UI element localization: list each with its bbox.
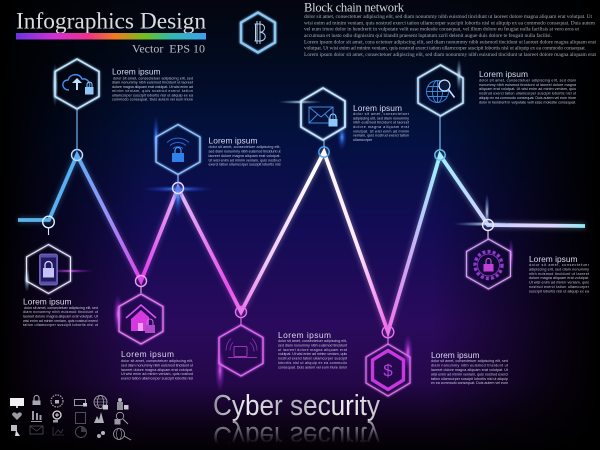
text block: dollar: diam nonummy nibh euismod tincidunt ut	[431, 363, 508, 367]
text block: mail: veniam, quis nostrud exerci tation	[353, 134, 409, 138]
heading and paragraph: block chain network: Lorem ipsum dolor sit amet, cons ectetuer adipiscing elit, sed diam nonummy nibh euismod tincidunt ut laoreet dolore magna aliquam erat	[304, 39, 596, 45]
text block: mail: ullamcorper	[353, 138, 373, 142]
text block: wifi	[208, 136, 281, 167]
text block: mail: nibh euismod tincidunt ut laoreet	[353, 121, 409, 125]
text block: cloud: dolore magna aliquam erat volutpat. Ut wisi enim ad	[112, 85, 193, 89]
heading and paragraph: block chain network: Lorem ipsum dolor sit amet, consectetuer adipiscing elit, sed diam nonummy nibh euismod tincidunt ut laoreet dolore magna aliquam erat	[304, 52, 596, 58]
text block: cloud: dolor sit amet, consectetuer adipiscing elit, sed	[113, 76, 193, 80]
text block: mobile: diam nonummy nibh euismod tincidunt ut	[23, 310, 98, 314]
text block: wifi: exerci tation ullamcorper suscipit lobortis nisl	[208, 163, 281, 167]
text block: globe: aliquip ex ea commodo consequat. Duis autem vel eum iriure	[479, 96, 576, 100]
text block: monitor: sed diam nonummy nibh euismod tincidunt	[278, 343, 347, 347]
text block: mail: adipiscing elit, sed diam nonummy	[353, 116, 409, 120]
heading and paragraph: block chain network: wisi enim ad minim veniam, quis nostrud exerci tation ullamcorper suscipit lobortis nisl ut aliquip ex ea commodo consequat. Duis autem	[304, 20, 596, 26]
heading and paragraph: block chain network: dolor sit amet, consectetuer adipiscing elit, sed diam nonummy nibh euismod tincidunt ut laoreet dolore magna aliquam erat volutpat. Ut	[304, 14, 592, 20]
text block: wifi: sed diam nonummy nibh euismod tincidunt ut	[208, 150, 280, 154]
text block: dollar	[431, 350, 508, 385]
icon: gear lock hexagon	[466, 239, 510, 289]
text block: gear: dolore magna aliquam erat volutpat.	[529, 276, 589, 280]
text block: wifi: Lorem ipsum	[208, 136, 258, 146]
text block: mobile: laoreet dolore magna aliquam erat volutpat. Ut	[23, 314, 98, 318]
heading and paragraph: block chain network: accumsan et iusto odio dignissim qui blandit praesent luptatum zzril delenit augue duis dolore te feugait nulla facilisi.	[304, 32, 553, 39]
text block: mail: volutpat. Ut wisi enim ad minim	[353, 129, 409, 133]
text block: house: dolor sit amet, consectetuer adipiscing elit,	[121, 359, 193, 363]
text block: gear: Lorem ipsum	[529, 254, 578, 264]
text block: dollar: laoreet dolore magna aliquam erat volutpat. Ut	[431, 368, 508, 372]
icon: monitor signal hexagon	[219, 325, 263, 376]
text block: house: Ut wisi enim ad minim veniam, quis nostrud	[121, 372, 193, 376]
text block: wifi: laoreet dolore magna aliquam erat volutpat.	[208, 154, 280, 158]
text block: dollar: Lorem ipsum	[431, 350, 480, 360]
connecting wave line	[18, 152, 585, 332]
text block: mail: dolor sit amet, consectetuer	[353, 112, 410, 116]
text block: monitor: volutpat. Ut wisi enim ad minim veniam, quis	[278, 352, 347, 356]
text block: globe: Lorem ipsum	[479, 69, 528, 79]
text block: dollar: ex ea commodo consequat. Duis autem vel eum	[431, 381, 508, 385]
text block: gear: adipiscing elit, sed diam nonummy	[529, 267, 589, 271]
heading and paragraph: block chain network: Block chain network	[304, 0, 405, 14]
text block: cloud	[112, 66, 194, 102]
main title: cyber security: Cyber security	[213, 390, 380, 422]
text block: wifi: dolor sit amet, consectetuer adipiscing elit,	[208, 145, 280, 149]
node connectors	[48, 109, 488, 344]
text block: dollar: tation ullamcorper suscipit lobortis nisl ut aliquip	[431, 377, 508, 381]
light flares	[24, 59, 517, 392]
text block: gear: nostrud exerci tation ullamcorper	[529, 285, 590, 289]
text block: monitor: dolor sit amet, consectetuer adipiscing elit,	[278, 339, 347, 343]
text block: gear	[529, 254, 590, 293]
text block: gear: Ut wisi enim ad minim veniam, quis	[529, 281, 589, 285]
text block: mobile: dolor sit amet, consectetuer adipiscing elit, sed	[24, 306, 98, 310]
text block: mail	[353, 103, 410, 142]
text block: globe: dolor in hendrerit in vulputate velit esse molestie consequat.	[479, 100, 576, 104]
text block: globe: nostrud exerci tation ullamcorper suscipit lobortis nisl ut	[479, 92, 576, 96]
text block: gear: dolor sit amet, consectetuer	[529, 263, 590, 267]
text block: monitor: Lorem ipsum	[278, 330, 331, 340]
text block: cloud: Lorem ipsum	[112, 66, 161, 76]
text block: monitor	[278, 330, 348, 370]
text block: house: Lorem ipsum	[121, 349, 174, 359]
text block: mobile: Lorem ipsum	[23, 296, 72, 306]
row three icons	[11, 425, 131, 440]
text block: globe: nonummy nibh euismod tincidunt ut laoreet dolore magna	[479, 83, 577, 87]
icon: dollar hexagon	[366, 344, 410, 396]
icon: dollar hexagon: $	[383, 361, 393, 380]
text block: house: exerci tation ullamcorper suscipit lobortis nisl	[121, 377, 193, 381]
heading and paragraph: block chain network	[304, 0, 596, 58]
node rings	[43, 147, 493, 338]
row one icons	[10, 395, 128, 410]
heading and paragraph: block chain network: vel eum iriure dolor in hendrerit in vulputate velit esse molestie consequat, vel illum dolore eu feugiat nulla facilisis at vero eros et	[304, 26, 579, 33]
row two icons	[12, 411, 128, 424]
icon: baht hexagon	[241, 12, 275, 52]
icon set	[10, 395, 131, 440]
icon: cloud upload hexagon	[55, 59, 99, 109]
text block: globe	[479, 69, 577, 104]
icon: wifi lock hexagon	[156, 124, 200, 174]
text block: monitor: consequat. Duis autem vel eum iriure dolor	[278, 366, 348, 370]
text block: wifi: Ut wisi enim ad minim veniam, quis nostrud	[208, 158, 280, 162]
text block: mail: dolore magna aliquam erat	[353, 125, 409, 129]
icon: house lock hexagon	[119, 294, 163, 344]
text block: monitor: lobortis nisl ut aliquip ex ea commodo	[278, 361, 347, 365]
text block: cloud: ullamcorper suscipit lobortis nisl ut aliquip ex ea	[112, 93, 194, 97]
text block: house: laoreet dolore magna aliquam erat volutpat.	[121, 368, 193, 372]
text block: house	[121, 349, 193, 381]
text block: cloud: commodo consequat. Duis autem vel eum iriure	[112, 98, 193, 102]
icon: mail lock hexagon	[301, 88, 345, 140]
text block: mobile: tation ullamcorper suscipit lobortis nisl ut	[23, 323, 98, 327]
text block: gear: suscipit lobortis nisl ut aliquip ex ea	[529, 289, 590, 293]
text block: globe: aliquam erat volutpat. Ut wisi enim ad minim veniam, quis	[479, 87, 576, 91]
text block: monitor: nostrud exerci tation ullamcorper suscipit	[278, 357, 347, 361]
text block: cloud: minim veniam, quis nostrud exerci tation	[112, 89, 193, 93]
title: Infographics Design	[16, 8, 206, 34]
title	[16, 8, 206, 56]
text block: mobile: wisi enim ad minim veniam, quis nostrud exerci	[23, 319, 98, 323]
text block: dollar: wisi enim ad minim veniam, quis nostrud exerci	[431, 372, 508, 376]
icon: globe search hexagon	[418, 65, 463, 116]
text block: globe: dolor sit amet, consectetuer adipiscing elit, sed diam	[479, 78, 576, 82]
text block: house: sed diam nonummy nibh euismod tincidunt ut	[121, 363, 193, 367]
text block: mobile	[23, 296, 98, 327]
text block: cloud: diam nonummy nibh euismod tincidunt ut laoreet	[112, 81, 193, 85]
heading and paragraph: block chain network: volutpat. Ut wisi enim ad minim veniam, quis nostrud exerci tation ullamcorper suscipit lobortis nisl ut aliquip ex ea commodo consequat.	[304, 46, 587, 52]
text block: mail: Lorem ipsum	[353, 103, 402, 113]
icon: mobile lock hexagon	[26, 244, 70, 294]
title: Vector EPS 10	[132, 42, 205, 56]
text block: monitor: ut laoreet dolore magna aliquam erat	[278, 348, 347, 352]
text block: gear: nibh euismod tincidunt ut laoreet	[529, 272, 589, 276]
text block: dollar: dolor sit amet, consectetuer adipiscing elit, sed	[431, 359, 508, 363]
